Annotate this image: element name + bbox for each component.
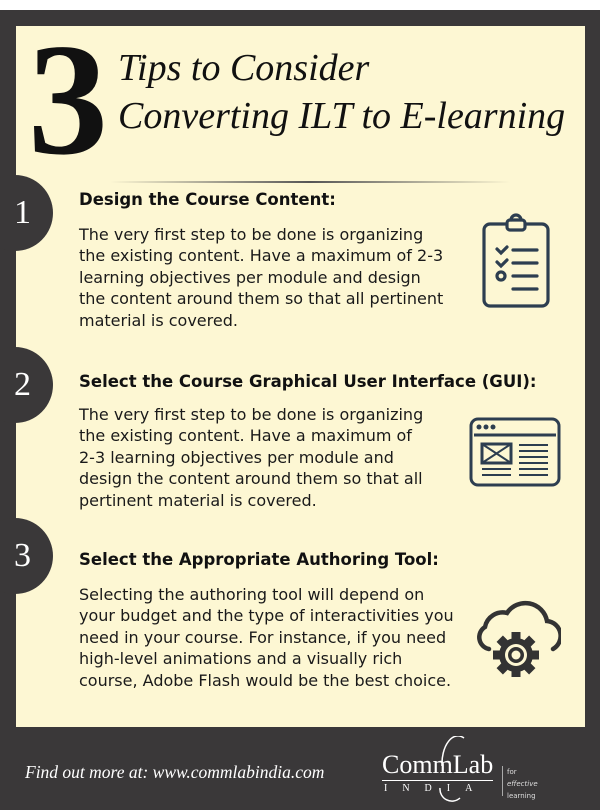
logo: INDIA xyxy=(384,783,487,794)
heading 3: Select the Appropriate Authoring Tool: xyxy=(79,550,439,569)
number circle 3: 3 xyxy=(14,537,31,574)
big number 3: 3 xyxy=(28,10,108,188)
body 2: the existing content. Have a maximum of xyxy=(79,426,412,445)
body 2 xyxy=(78,405,423,510)
body 1 xyxy=(78,225,443,330)
icon: cloud gear xyxy=(477,600,561,677)
logo: effective learning xyxy=(507,780,538,800)
title xyxy=(118,47,565,137)
body 1: The very first step to be done is organizing xyxy=(79,225,423,244)
body 2: design the content around them so that all xyxy=(79,469,423,488)
body 2: pertinent material is covered. xyxy=(79,491,317,510)
body 3: high-level animations and a visually rich xyxy=(79,649,402,668)
icon: browser window xyxy=(470,418,560,486)
body 1: the content around them so that all pertinent xyxy=(79,289,443,308)
body 3 xyxy=(79,585,454,690)
number circle 1 xyxy=(0,175,53,251)
body 3: your budget and the type of interactivities you xyxy=(79,606,454,625)
body 1: learning objectives per module and design xyxy=(79,268,421,287)
number circle 3 xyxy=(0,518,53,594)
heading 1: Design the Course Content: xyxy=(79,190,336,209)
title: Tips to Consider xyxy=(118,47,369,89)
logo xyxy=(382,736,538,802)
body 2: 2-3 learning objectives per module and xyxy=(79,448,394,467)
logo: CommLab xyxy=(382,750,493,779)
number circle 2: 2 xyxy=(14,366,31,403)
divider xyxy=(110,181,510,183)
body 2: The very first step to be done is organizing xyxy=(79,405,423,424)
body 1: material is covered. xyxy=(79,311,238,330)
body 3: need in your course. For instance, if you need xyxy=(79,628,446,647)
body 1: the existing content. Have a maximum of 2-3 xyxy=(79,246,443,265)
icon: clipboard xyxy=(482,213,550,308)
number circle 2 xyxy=(0,347,53,423)
heading 2: Select the Course Graphical User Interface (GUI): xyxy=(79,372,537,391)
logo: for xyxy=(507,768,517,776)
footer text: Find out more at: www.commlabindia.com xyxy=(25,762,324,782)
title: Converting ILT to E-learning xyxy=(118,95,565,137)
body 3: course, Adobe Flash would be the best choice. xyxy=(79,671,451,690)
number circle 1: 1 xyxy=(14,194,31,231)
body 3: Selecting the authoring tool will depend on xyxy=(79,585,424,604)
